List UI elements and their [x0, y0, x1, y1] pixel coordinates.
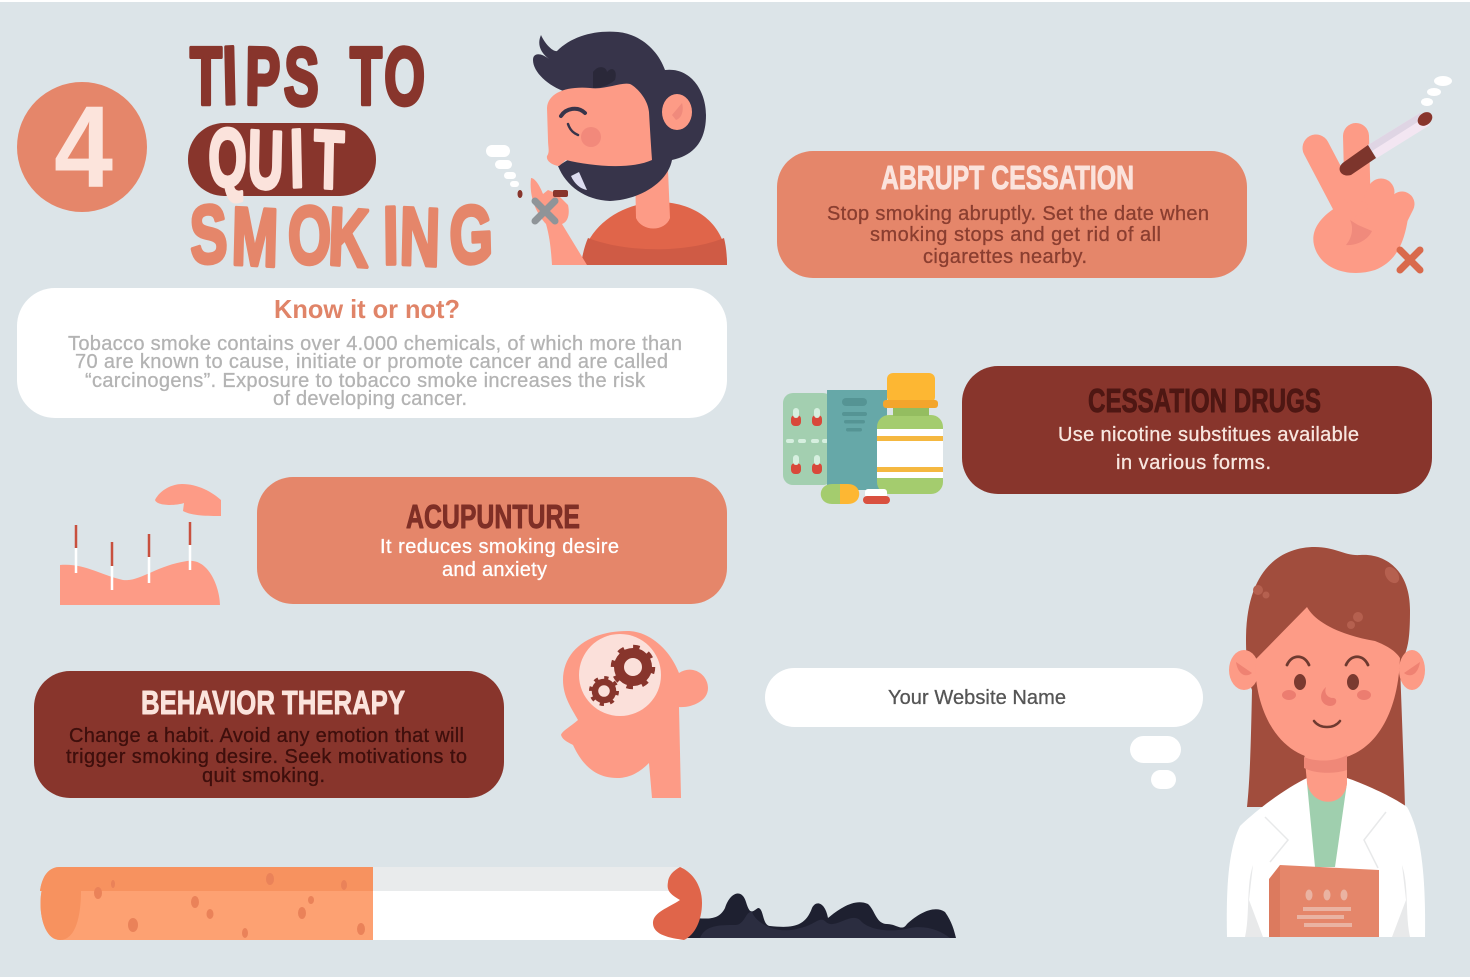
- panel body text: Tobacco smoke contains over 4.000 chemicals, of which more than: [68, 333, 682, 355]
- man face: [547, 84, 652, 166]
- illustration: doctor: [1227, 547, 1425, 937]
- man arm and hand: [531, 178, 587, 265]
- icon: medicine: [783, 373, 943, 504]
- icon: acupuncture: [60, 484, 221, 605]
- panel: abrupt cessation: [777, 151, 1247, 278]
- title line: tips to: TIPS TO: [190, 29, 426, 124]
- man hair and beard: [533, 32, 706, 201]
- man eyebrow and closed eye: [561, 109, 585, 116]
- panel body text: [68, 333, 682, 410]
- panel body text: of developing cancer.: [273, 388, 467, 410]
- behavior therapy heading: BEHAVIOR THERAPY: [141, 684, 405, 721]
- grey cross: [535, 201, 555, 221]
- medicine bottle: [877, 373, 943, 494]
- small gear: [590, 678, 618, 704]
- cigarette on hand: [1340, 109, 1435, 176]
- doctor eyes: [1294, 674, 1359, 690]
- man cigarette: [518, 190, 568, 198]
- panel heading: Know it or not?: [274, 294, 460, 324]
- abrupt cessation text: [827, 203, 1209, 268]
- doctor neck: [1304, 750, 1347, 802]
- panel: acupunture: [257, 477, 727, 604]
- cessation drugs heading: CESSATION DRUGS: [1088, 382, 1321, 419]
- cigarette paper: [373, 867, 683, 940]
- ear shape: [155, 484, 221, 516]
- man ear: [662, 94, 692, 130]
- abrupt cessation text: cigarettes nearby.: [923, 246, 1087, 268]
- blister pack: [783, 393, 833, 485]
- capsule: [821, 484, 859, 504]
- man neck: [635, 170, 670, 228]
- medicine box: [827, 390, 887, 490]
- cigarette filter: [40, 867, 373, 940]
- behavior therapy text: Change a habit. Avoid any emotion that will: [69, 725, 464, 747]
- illustration: bearded man smoking: [486, 32, 727, 265]
- number badge: 4: [17, 82, 147, 212]
- smoke puffs: [486, 145, 519, 187]
- behavior therapy text: [66, 725, 467, 787]
- abrupt cessation text: Stop smoking abruptly. Set the date when: [827, 203, 1209, 225]
- smoke: [1421, 76, 1452, 106]
- abrupt cessation text: smoking stops and get rid of all: [870, 224, 1161, 246]
- man tooth highlight: [571, 172, 587, 190]
- ash trail: [684, 893, 956, 938]
- red cross: [1400, 250, 1420, 270]
- cessation drugs text: Use nicotine substitues available: [1058, 424, 1359, 446]
- abrupt cessation heading: ABRUPT CESSATION: [881, 159, 1134, 196]
- doctor eyebrows: [1287, 657, 1368, 665]
- icon: hand with cigarette: [1313, 76, 1452, 273]
- doctor shirt: [1307, 783, 1347, 867]
- doctor nose: [1321, 687, 1336, 706]
- acupunture text: [380, 536, 619, 581]
- large gear: [613, 647, 653, 687]
- doctor clipboard: [1269, 865, 1379, 937]
- hand fingers: [1316, 136, 1402, 236]
- behavior therapy text: quit smoking.: [202, 765, 325, 787]
- title: [188, 29, 494, 285]
- brain circle: [579, 634, 661, 716]
- behavior therapy text: trigger smoking desire. Seek motivations to: [66, 746, 467, 768]
- acupuncture needles: [76, 522, 190, 590]
- head silhouette: [561, 631, 708, 798]
- doctor mouth: [1314, 721, 1340, 727]
- cessation drugs text: in various forms.: [1116, 452, 1271, 474]
- website name: Your Website Name: [888, 687, 1066, 709]
- doctor cheeks: [1282, 690, 1371, 700]
- coat lapels: [1265, 812, 1386, 868]
- panel body text: “carcinogens”. Exposure to tobacco smoke increases the risk: [85, 370, 646, 392]
- illustration: burning cigarette: [40, 867, 956, 940]
- title pill: quit: QUIT: [207, 112, 345, 207]
- panel: behavior therapy: [34, 671, 504, 798]
- doctor hair: [1246, 547, 1410, 807]
- panel: know it or not: [17, 288, 727, 418]
- acupunture text: It reduces smoking desire: [380, 536, 619, 558]
- doctor coat: [1227, 778, 1425, 937]
- tablet: [863, 489, 890, 504]
- doctor face: [1255, 607, 1400, 760]
- icon: head with gears: [561, 631, 708, 798]
- hand palm: [1313, 201, 1408, 273]
- man shirt: [581, 202, 727, 265]
- burning tip: [653, 867, 702, 940]
- doctor ears: [1229, 650, 1425, 690]
- panel: cessation drugs: [962, 366, 1432, 494]
- thought bubbles: [1130, 736, 1181, 789]
- cessation drugs text: [1058, 424, 1359, 474]
- title line: smoking: SMOKING: [188, 188, 494, 285]
- acupunture heading: ACUPUNTURE: [406, 498, 580, 535]
- website bubble: [765, 668, 1203, 727]
- skin surface: [60, 561, 220, 605]
- coat side shading: [1245, 865, 1410, 937]
- acupunture text: and anxiety: [442, 559, 547, 581]
- panel body text: 70 are known to cause, initiate or promote cancer and are called: [75, 351, 668, 373]
- man cheek: [581, 127, 601, 147]
- number badge: 4: 4: [54, 82, 113, 212]
